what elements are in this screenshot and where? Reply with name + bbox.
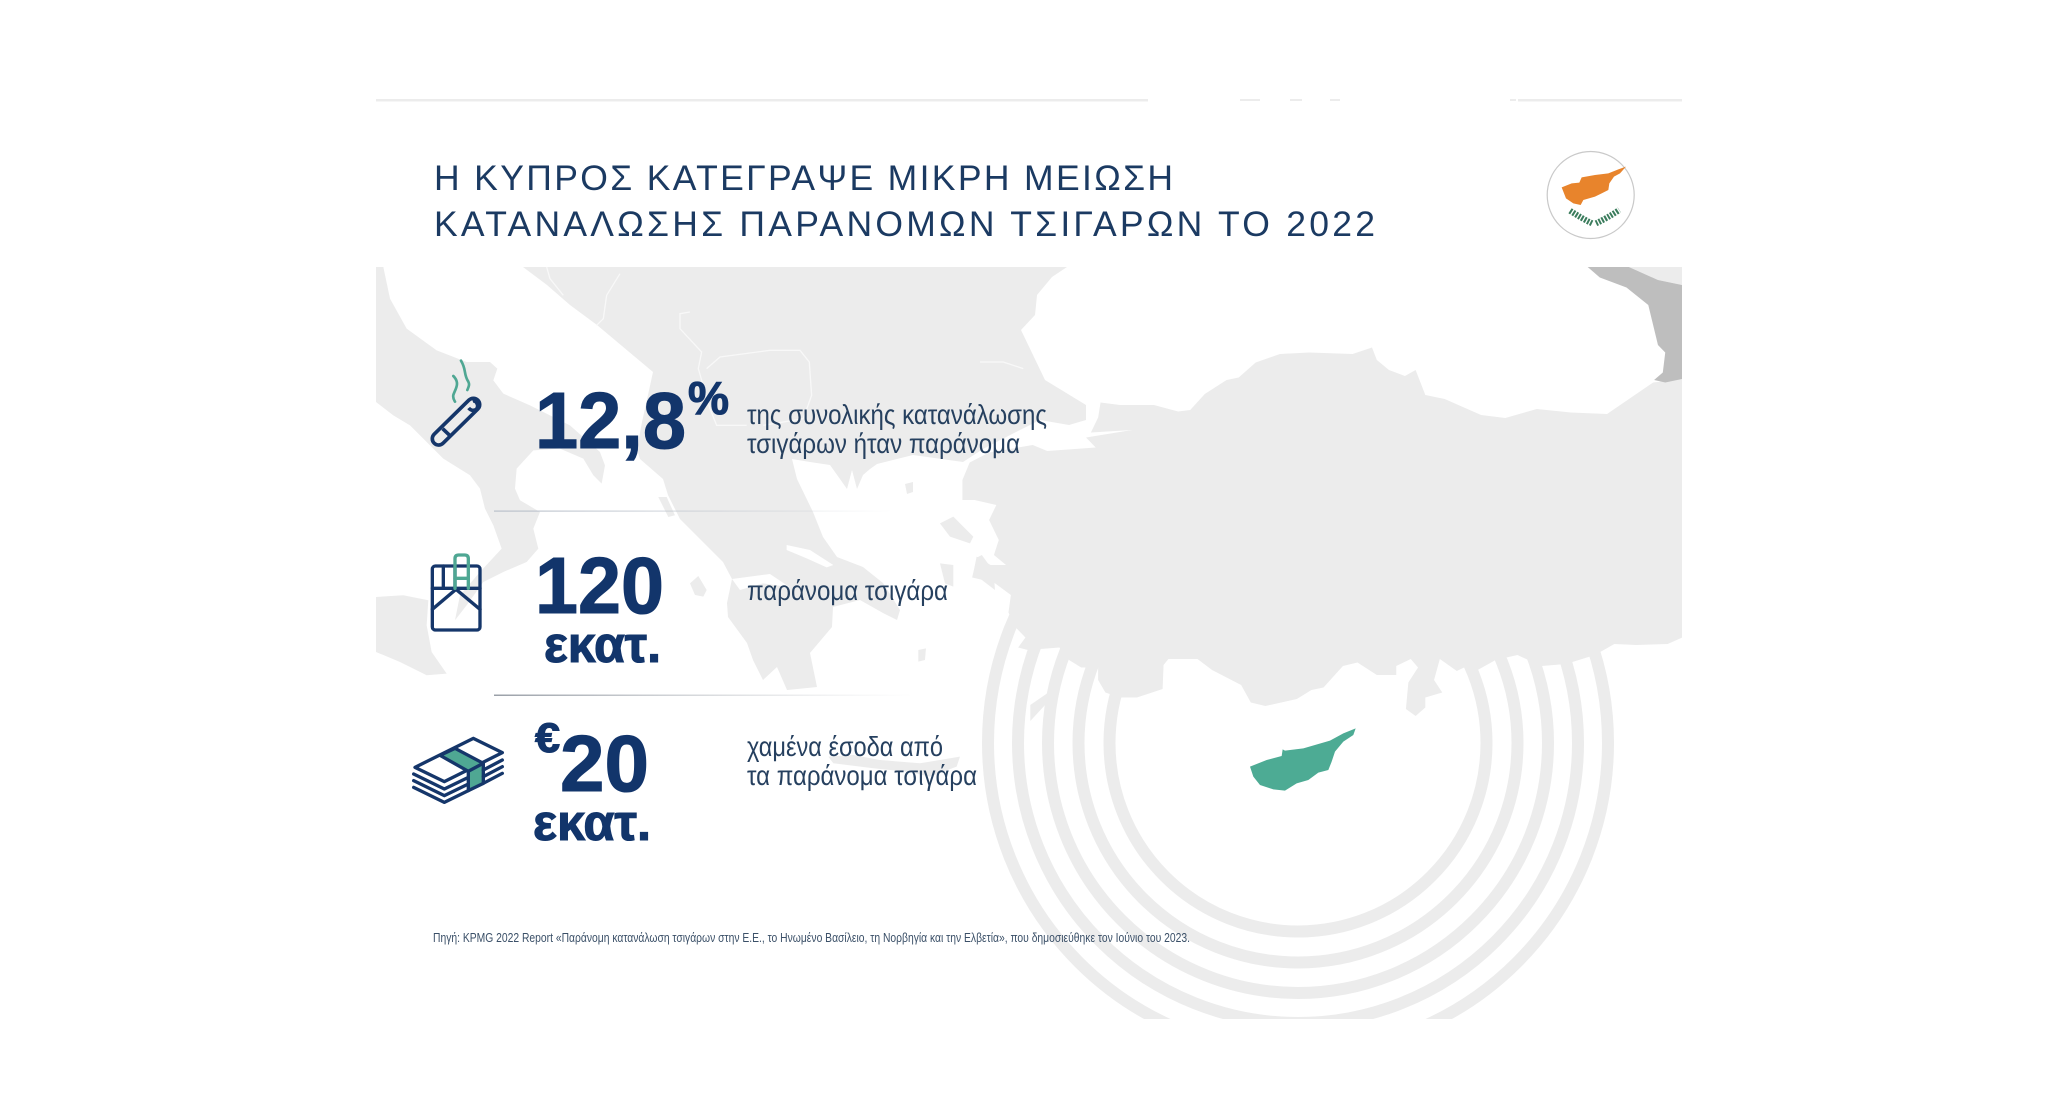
text: lost revenue: χαμένα έσοδα από xyxy=(747,731,943,762)
icon: cigarette pack xyxy=(432,555,480,630)
icon: Cyprus flag badge xyxy=(1547,152,1634,238)
stat 3: 20 million euro: εκατ. xyxy=(533,794,651,851)
divider xyxy=(494,694,914,696)
title: Η ΚΥΠΡΟΣ ΚΑΤΕΓΡΑΨΕ ΜΙΚΡΗ ΜΕΙΩΣΗ xyxy=(434,158,1173,198)
title: ΚΑΤΑΝΑΛΩΣΗΣ ΠΑΡΑΝΟΜΩΝ ΤΣΙΓΑΡΩΝ ΤΟ 2022 xyxy=(434,204,1375,244)
stat 1: 12,8%: % xyxy=(688,372,729,424)
stat 2: 120 million xyxy=(535,541,664,673)
map background xyxy=(376,267,1682,1053)
stat 2: 120 million: εκατ. xyxy=(544,616,661,673)
stat 3: 20 million euro: 20 xyxy=(560,719,649,808)
text: lost revenue xyxy=(747,731,977,791)
borders xyxy=(547,267,1023,425)
land: Turkey and the Middle East xyxy=(962,267,1682,721)
concentric rings around Cyprus xyxy=(982,614,1614,1019)
land: Balkans and mainland Greece xyxy=(523,267,1086,690)
land: Samothrace xyxy=(905,482,913,494)
stat 1: 12,8%: 12,8 xyxy=(535,376,686,465)
text: share of consumption xyxy=(747,399,1047,459)
divider xyxy=(494,510,894,512)
text: lost revenue: τα παράνομα τσιγάρα xyxy=(747,760,977,791)
sea inlets: Gulfs of Corinth and Patras xyxy=(732,545,833,590)
map: Cyprus highlighted xyxy=(1250,728,1356,791)
title xyxy=(434,158,1375,244)
text: share of consumption: της συνολικής κατανάλωσης xyxy=(747,399,1047,430)
source note: Πηγή: KPMG 2022 Report «Παράνομη κατανάλωση τσιγάρων στην Ε.Ε., το Ηνωμένο Βασίλειο, τη Νορβηγία και την Ελβετία», που δημοσιεύθηκε τον Ιούνιο του 2023. xyxy=(433,931,1190,945)
land: Crete and Aegean islands xyxy=(690,517,995,777)
stat 2: 120 million: 120 xyxy=(535,541,664,630)
text: share of consumption: τσιγάρων ήταν παράνομα xyxy=(747,428,1020,459)
infographic canvas xyxy=(376,99,1682,1019)
icon: stack of banknotes xyxy=(414,738,502,802)
land: Italy and Sicily xyxy=(376,267,675,675)
stat 3: 20 million euro: € xyxy=(535,714,560,761)
top rule xyxy=(376,99,1682,102)
land: neighbouring darker territory xyxy=(1588,267,1682,382)
icon: smoking cigarette xyxy=(430,361,482,448)
text: illegal cigarettes: παράνομα τσιγάρα xyxy=(747,575,948,606)
stat 3: 20 million euro xyxy=(533,714,651,851)
